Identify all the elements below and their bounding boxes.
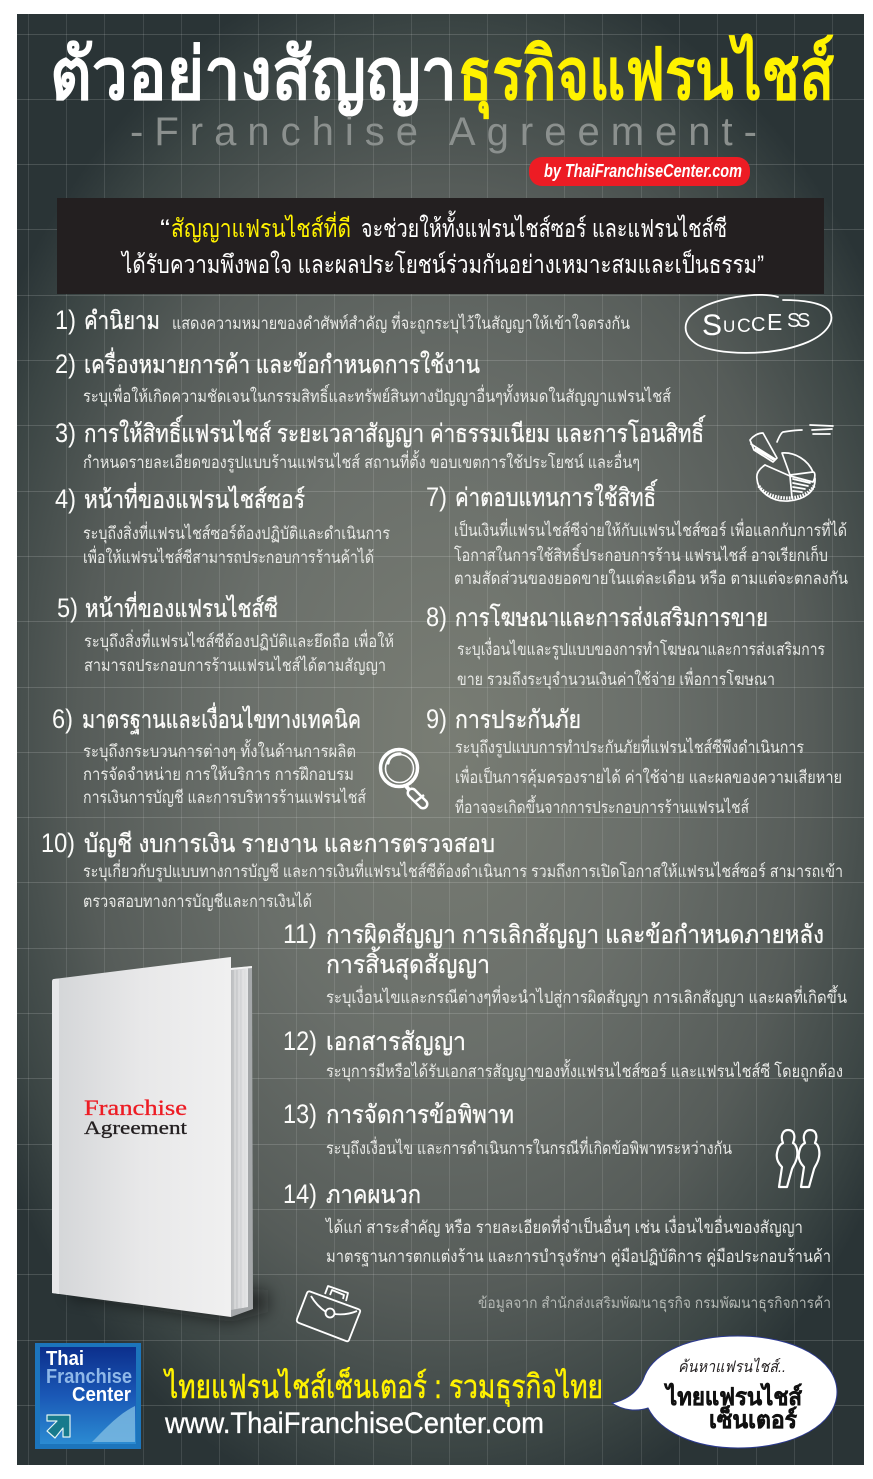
logo: Thai Franchise Center: Center bbox=[72, 1384, 131, 1406]
item 6: การเงินการบัญชี และการบริหารร้านแฟรนไชส์ bbox=[83, 787, 367, 807]
speech bubble: ไทยแฟรนไชส์ bbox=[663, 1382, 802, 1411]
item 1: แสดงความหมายของคำศัพท์สำคัญ ที่จะถูกระบุไว้ในสัญญาให้เข้าใจตรงกัน bbox=[172, 311, 630, 334]
item 6: การจัดจำหน่าย การให้บริการ การฝึกอบรม bbox=[83, 764, 354, 784]
item 13: 13) bbox=[283, 1099, 317, 1129]
item 9: ระบุถึงรูปแบบการทำประกันภัยที่แฟรนไชส์ซีพึงดำเนินการ bbox=[455, 735, 804, 758]
item 12: เอกสารสัญญา bbox=[326, 1028, 466, 1056]
subtitle: Franchise Agreement: -Franchise Agreement- bbox=[130, 110, 757, 154]
item 13: การจัดการข้อพิพาท bbox=[326, 1101, 514, 1129]
item 2 bbox=[55, 347, 672, 407]
icon: success ellipse: E bbox=[767, 309, 782, 335]
icon: success ellipse: S bbox=[797, 310, 810, 332]
item 6 bbox=[52, 702, 367, 807]
icon: success ellipse bbox=[686, 295, 831, 353]
item 6: 6) bbox=[52, 704, 73, 734]
icon: success ellipse: S bbox=[787, 310, 800, 332]
item 10: ตรวจสอบทางการบัญชีและการเงินได้ bbox=[83, 891, 312, 911]
icon: two people bbox=[777, 1130, 819, 1187]
icon: success ellipse: C bbox=[751, 314, 765, 336]
item 3: 3) bbox=[55, 418, 76, 448]
item 4 bbox=[55, 482, 390, 567]
item 8: การโฆษณาและการส่งเสริมการขาย bbox=[455, 603, 768, 632]
item 1 bbox=[55, 305, 630, 335]
item 7: 7) bbox=[426, 482, 447, 512]
quote box: สัญญาแฟรนไชส์ที่ดี bbox=[171, 211, 351, 243]
speech bubble: เซ็นเตอร์ bbox=[709, 1405, 797, 1434]
item 5: หน้าที่ของแฟรนไชส์ซี bbox=[85, 591, 278, 623]
quote box bbox=[57, 198, 824, 294]
title bbox=[50, 32, 834, 120]
item 7: ค่าตอบแทนการใช้สิทธิ์ bbox=[455, 479, 658, 512]
item 8: 8) bbox=[426, 602, 447, 632]
item 14 bbox=[283, 1179, 831, 1267]
icon: briefcase bbox=[297, 1286, 360, 1341]
item 1: คำนิยาม bbox=[84, 307, 160, 335]
item 1: 1) bbox=[55, 305, 76, 335]
icon: success ellipse: C bbox=[737, 316, 751, 337]
item 5 bbox=[57, 591, 394, 675]
item 4: ระบุถึงสิ่งที่แฟรนไชส์ซอร์ต้องปฏิบัติและดำเนินการ bbox=[83, 521, 390, 544]
item 3 bbox=[55, 415, 706, 473]
book illustration bbox=[52, 957, 268, 1322]
item 11: การผิดสัญญา การเลิกสัญญา และข้อกำหนดภายหลัง bbox=[326, 921, 824, 949]
speech bubble: ค้นหาแฟรนไชส์.. bbox=[678, 1357, 786, 1376]
item 4: เพื่อให้แฟรนไชส์ซีสามารถประกอบการร้านค้าได้ bbox=[83, 545, 374, 567]
title: ตัวอย่างสัญญา bbox=[50, 35, 457, 117]
logo: Thai Franchise Center: Franchise bbox=[46, 1366, 132, 1388]
item 12 bbox=[283, 1026, 843, 1082]
item 14: 14) bbox=[283, 1179, 317, 1209]
item 8 bbox=[426, 602, 825, 690]
item 9 bbox=[426, 704, 842, 817]
item 13: ระบุถึงเงื่อนไข และการดำเนินการในกรณีที่เกิดข้อพิพาทระหว่างกัน bbox=[326, 1136, 732, 1159]
footer tagline: www.ThaiFranchiseCenter.com bbox=[164, 1407, 544, 1440]
item 5: ระบุถึงสิ่งที่แฟรนไชส์ซีต้องปฏิบัติและยึดถือ เพื่อให้ bbox=[84, 629, 394, 652]
book cover bbox=[52, 957, 231, 1317]
item 5: 5) bbox=[57, 593, 78, 623]
book title bbox=[84, 1095, 188, 1139]
footer tagline: ไทยแฟรนไชส์เซ็นเตอร์ : รวมธุรกิจไทย bbox=[163, 1367, 603, 1407]
item 10: บัญชี งบการเงิน รายงาน และการตรวจสอบ bbox=[84, 830, 495, 858]
badge: by ThaiFranchiseCenter.com bbox=[529, 157, 750, 186]
book title: Agreement bbox=[84, 1118, 188, 1139]
item 9: ที่อาจจะเกิดขึ้นจากการประกอบการร้านแฟรนไชส์ bbox=[455, 795, 749, 817]
item 10: 10) bbox=[41, 828, 75, 858]
item 13 bbox=[283, 1099, 732, 1159]
quote box: “ bbox=[160, 215, 170, 243]
item 12: 12) bbox=[283, 1026, 317, 1056]
footer tagline bbox=[163, 1367, 603, 1440]
item 8: ขาย รวมถึงระบุจำนวนเงินค่าใช้จ่าย เพื่อการโฆษณา bbox=[457, 667, 775, 690]
item 9: การประกันภัย bbox=[455, 706, 581, 734]
icon: success ellipse: U bbox=[723, 317, 735, 336]
badge: by ThaiFranchiseCenter.com: by ThaiFranchiseCenter.com bbox=[544, 161, 742, 181]
item 2: เครื่องหมายการค้า และข้อกำหนดการใช้งาน bbox=[84, 347, 480, 379]
item 14: ได้แก่ สาระสำคัญ หรือ รายละเอียดที่จำเป็นอื่นๆ เช่น เงื่อนไขอื่นของสัญญา bbox=[324, 1215, 803, 1237]
item 6: ระบุถึงกระบวนการต่างๆ ทั้งในด้านการผลิต bbox=[83, 739, 356, 762]
item 14: ภาคผนวก bbox=[326, 1181, 421, 1209]
item 3: การให้สิทธิ์แฟรนไชส์ ระยะเวลาสัญญา ค่าธรรมเนียม และการโอนสิทธิ์ bbox=[84, 415, 706, 448]
item 3: กำหนดรายละเอียดของรูปแบบร้านแฟรนไชส์ สถานที่ตั้ง ขอบเขตการใช้ประโยชน์ และอื่นๆ bbox=[83, 450, 640, 473]
item 6: มาตรฐานและเงื่อนไขทางเทคนิค bbox=[82, 702, 361, 734]
item 2: 2) bbox=[55, 349, 76, 379]
item 5: สามารถประกอบการร้านแฟรนไชส์ได้ตามสัญญา bbox=[84, 655, 386, 675]
item 4: 4) bbox=[55, 484, 76, 514]
logo arrow bbox=[47, 1415, 70, 1438]
item 2: ระบุเพื่อให้เกิดความชัดเจนในกรรมสิทธิ์และทรัพย์สินทางปัญญาอื่นๆทั้งหมดในสัญญาแฟรนไชส์ bbox=[83, 384, 672, 407]
icon: pie chart bbox=[750, 425, 833, 501]
quote box: จะช่วยให้ทั้งแฟรนไชส์ซอร์ และแฟรนไชส์ซี bbox=[361, 210, 727, 243]
item 11: การสิ้นสุดสัญญา bbox=[326, 946, 490, 980]
item 9: 9) bbox=[426, 704, 447, 734]
item 11 bbox=[283, 919, 847, 1008]
item 10 bbox=[41, 828, 843, 911]
book pages bbox=[231, 966, 253, 1317]
item 7 bbox=[426, 479, 848, 588]
source note: ข้อมูลจาก สำนักส่งเสริมพัฒนาธุรกิจ กรมพัฒนาธุรกิจการค้า bbox=[478, 1295, 831, 1313]
icon: success ellipse: S bbox=[702, 309, 722, 342]
book title: Franchise bbox=[84, 1095, 187, 1120]
icon: magnifying glass bbox=[380, 750, 424, 804]
speech bubble bbox=[612, 1336, 837, 1448]
logo: Thai Franchise Center: Thai bbox=[46, 1348, 84, 1370]
item 11: 11) bbox=[283, 919, 317, 949]
item 4: หน้าที่ของแฟรนไชส์ซอร์ bbox=[84, 482, 305, 514]
logo: Thai Franchise Center bbox=[35, 1343, 141, 1449]
